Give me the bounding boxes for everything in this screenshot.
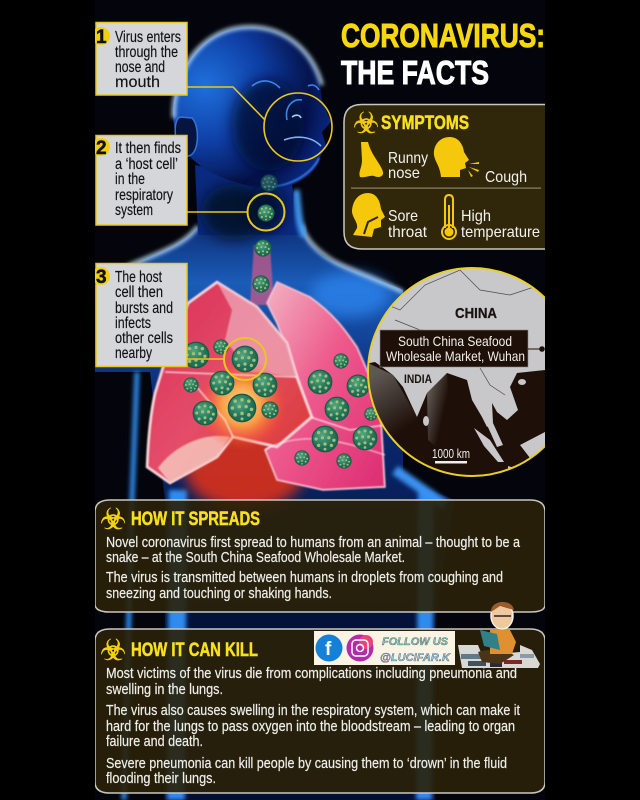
lower chest glow [185, 430, 305, 510]
torso rim light [128, 225, 403, 292]
runny nose label [388, 150, 428, 182]
map land [360, 260, 560, 474]
step 2 text [115, 140, 181, 219]
body text: snake – at the South China Seafood Wholesale Market. [106, 550, 405, 566]
high temperature label: High [461, 208, 491, 225]
ring: burst cell [224, 338, 266, 380]
step 2 text: in the [115, 171, 145, 188]
icon: facebook [316, 634, 342, 662]
follow text: FOLLOW US [382, 636, 449, 648]
step 2 text: a ‘host cell’ [115, 156, 178, 173]
sea shade: Arabian Sea [366, 362, 425, 450]
step 2 number: 2 [96, 138, 107, 159]
icon: facebook: f [325, 639, 332, 660]
sea shade: Bay of Bengal [427, 373, 452, 460]
step 1 text: Virus enters [115, 29, 181, 46]
map ring [368, 268, 576, 476]
body text: hard for the lungs to pass oxygen into the bloodstream – leading to organ [106, 719, 515, 735]
icon: biohazard: ☣ [100, 633, 126, 667]
step 3 text: nearby [115, 345, 152, 362]
step 1 text: mouth [115, 74, 160, 91]
icon: sore throat head [352, 193, 385, 237]
body text: sneezing and touching or shaking hands. [106, 586, 332, 602]
step 1 box [92, 22, 187, 95]
land: Hainan [518, 379, 526, 385]
market label [380, 330, 528, 367]
book held [480, 630, 500, 650]
neck shadow [201, 184, 269, 240]
panel: how it spreads [95, 500, 545, 612]
step 2 text: respiratory [115, 187, 173, 204]
step 3 text: The host [115, 269, 162, 286]
virus particles [183, 175, 377, 468]
icon: coughing head [434, 137, 479, 177]
high temperature label: temperature [461, 224, 540, 241]
figure head [491, 602, 514, 629]
step 3 text: cell then [115, 284, 163, 301]
head [173, 27, 331, 188]
body text: swelling in the lungs. [106, 682, 223, 698]
land: Sumatra [474, 428, 504, 462]
market label: Wholesale Market, Wuhan [386, 348, 525, 364]
body text: The virus is transmitted between humans in droplets from coughing and [106, 570, 503, 586]
illustration: human body [95, 27, 455, 800]
left lung [147, 282, 312, 483]
body text: Novel coronavirus first spread to humans from an animal – thought to be a [106, 535, 521, 551]
right shoulder glow [310, 273, 390, 317]
illustration area [92, 0, 576, 800]
map: outbreak location [360, 260, 576, 476]
panel: symptoms [344, 104, 560, 249]
heading: HOW IT CAN KILL [131, 640, 258, 661]
scale bar [432, 447, 470, 464]
step 2 text: It then finds [115, 140, 181, 157]
figure shirt [490, 630, 516, 654]
figure legs [478, 650, 514, 664]
step 2 text: system [115, 202, 153, 219]
market label: South China Seafood [398, 333, 512, 349]
step 1 text: through the [115, 44, 178, 61]
step 1 text [115, 29, 181, 91]
social follow badge [314, 631, 455, 665]
runny nose label: Runny [388, 150, 428, 167]
land: Java [508, 466, 526, 474]
trachea [250, 245, 274, 305]
icon: biohazard: ☣ [100, 502, 126, 536]
step 2 box [92, 136, 187, 225]
callout rings and connector lines [187, 87, 332, 380]
India label: INDIA [404, 372, 432, 386]
sore throat label [388, 208, 428, 241]
left lung upper lobe highlight [217, 282, 297, 377]
left lung lower lobe highlight [158, 436, 230, 483]
step 1 number: 1 [96, 27, 107, 48]
ear [175, 117, 197, 156]
title: CORONAVIRUS: [341, 17, 545, 54]
scale bar: 1000 km [432, 447, 470, 461]
body text: failure and death. [106, 734, 203, 750]
right lung [265, 282, 385, 490]
step 3 text: bursts and [115, 300, 173, 317]
torso and shoulders [95, 225, 455, 800]
step 1 text: nose and [115, 59, 165, 76]
land: Sri Lanka [423, 416, 429, 426]
jaw rim light [262, 158, 319, 187]
sore throat label: Sore [388, 208, 418, 225]
heading: HOW IT SPREADS [131, 509, 260, 530]
ring: nose and mouth [264, 93, 332, 161]
icon: instagram [346, 634, 374, 662]
high temperature label [461, 208, 540, 241]
step 3 text [115, 269, 173, 362]
China label: CHINA [455, 305, 497, 322]
land: Malay Peninsula [487, 423, 503, 447]
neck [195, 165, 302, 235]
step 3 text: other cells [115, 330, 173, 347]
connector: step 1 [187, 87, 265, 120]
follow text: @LUCIFAR.K [380, 652, 451, 664]
body text: Most victims of the virus die from complications including pneumonia and [106, 666, 517, 682]
step 3 text: infects [115, 315, 151, 332]
ring: host cell [248, 194, 284, 230]
cough label: Cough [485, 169, 527, 186]
step 3 number: 3 [96, 267, 107, 288]
head rim light [174, 27, 322, 118]
panel: how it can kill [95, 629, 545, 793]
land: China, India and Southeast Asia [360, 260, 560, 427]
body text: The virus also causes swelling in the respiratory system, which can make it [106, 703, 520, 719]
title: THE FACTS [341, 54, 489, 91]
body text: flooding their lungs. [106, 771, 216, 787]
face shadow [232, 79, 304, 171]
body text: Severe pneumonia can kill people by causing them to ‘drown’ in the fluid [106, 756, 507, 772]
map borders [375, 270, 540, 395]
symptoms divider [351, 188, 541, 189]
cartoon reader on books [458, 602, 540, 668]
icon: nose [359, 142, 383, 177]
neck right light [296, 190, 304, 236]
body text [106, 666, 520, 787]
symptoms heading: SYMPTOMS [381, 113, 469, 134]
follow text [380, 636, 451, 664]
runny nose label: nose [388, 165, 420, 182]
connector: step 2 [187, 211, 247, 213]
icon: thermometer [442, 195, 456, 239]
lung fissures [165, 372, 385, 455]
title [341, 17, 545, 91]
connector: step 3 [187, 358, 224, 360]
bronchi glow [200, 364, 282, 446]
throat shadow [250, 184, 286, 232]
sore throat label: throat [388, 224, 428, 241]
facial features [252, 81, 321, 146]
land: Borneo [520, 432, 560, 460]
Wuhan pointer [528, 346, 545, 352]
body text [106, 535, 521, 602]
map sea [368, 268, 576, 476]
arms and waist glow [124, 372, 445, 800]
book stack [458, 645, 540, 668]
step 3 box [92, 264, 187, 366]
icon: biohazard: ☣ [353, 106, 379, 140]
infographic canvas [95, 0, 545, 800]
lungs illustration [147, 245, 385, 510]
